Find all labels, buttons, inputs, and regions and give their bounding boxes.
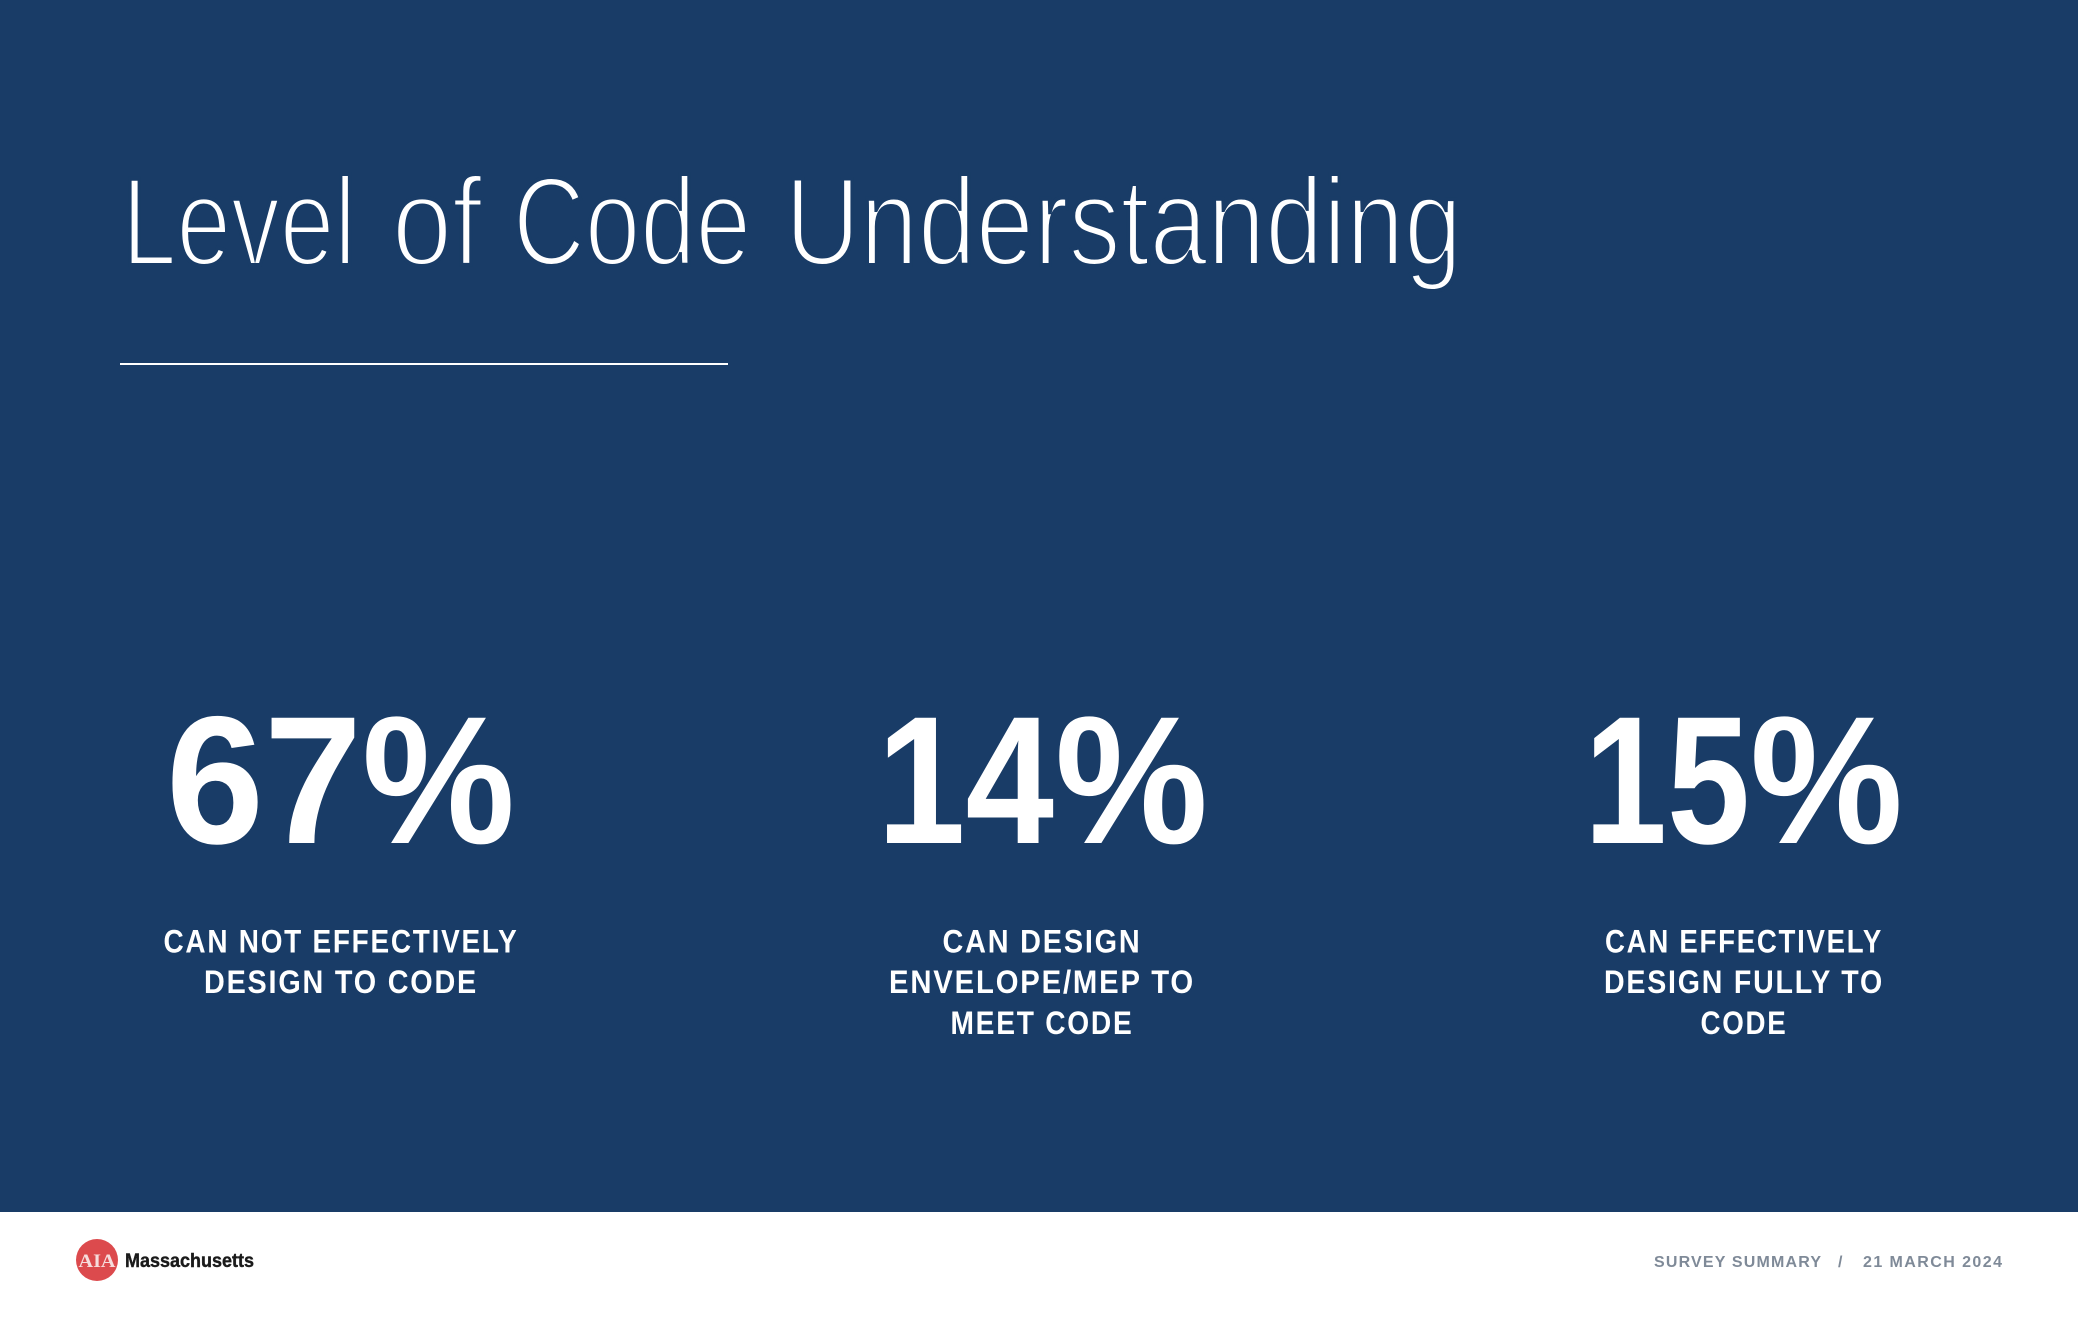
stat label: fully to code: DESIGN FULLY TO <box>1604 964 1884 1000</box>
stat label: envelope or MEP: ENVELOPE/MEP TO <box>889 964 1195 1000</box>
stat value: 14%: % <box>1055 678 1208 882</box>
stat label: envelope or MEP <box>889 924 1195 1041</box>
title <box>122 153 1462 292</box>
stat label: fully to code: CODE <box>1700 1005 1788 1041</box>
stat label: fully to code: CAN EFFECTIVELY <box>1605 924 1883 960</box>
stat label: envelope or MEP: CAN DESIGN <box>942 924 1142 960</box>
logo wordmark: Massachusetts <box>125 1251 254 1272</box>
stat value: 14%: 14 <box>877 678 1054 882</box>
title: Code <box>513 153 751 292</box>
stat label: cannot design to code: DESIGN TO CODE <box>204 964 478 1000</box>
stat label: envelope or MEP: MEET CODE <box>950 1005 1134 1041</box>
stat value: 67%: % <box>362 678 515 882</box>
footer note: survey summary and date: 21 MARCH 2024 <box>1863 1254 2002 1271</box>
stat value: 15%: 15 <box>1584 678 1750 882</box>
stat value: 67% <box>166 678 515 882</box>
stat value: 15% <box>1584 678 1903 882</box>
panel: 67 percent stat <box>164 678 518 1000</box>
footer band <box>0 1212 2078 1330</box>
footer note: survey summary and date: SURVEY SUMMARY <box>1654 1254 1821 1271</box>
title: Level <box>122 153 356 292</box>
icon: AIA red circle: AIA <box>78 1251 116 1272</box>
stat value: 67%: 67 <box>166 678 362 882</box>
stat value: 15%: % <box>1750 678 1903 882</box>
icon: AIA red circle <box>76 1239 118 1281</box>
stat label: cannot design to code: CAN NOT EFFECTIVELY <box>164 924 518 960</box>
logo: AIA Massachusetts <box>76 1239 254 1281</box>
stat value: 14% <box>877 678 1208 882</box>
stat label: cannot design to code <box>164 924 518 1000</box>
title: Understanding <box>785 153 1462 292</box>
title: of <box>392 153 482 292</box>
panel: 15 percent stat <box>1584 678 1903 1041</box>
footer note: survey summary and date: / <box>1838 1254 1843 1271</box>
panel: 14 percent stat <box>877 678 1208 1041</box>
stat label: fully to code <box>1604 924 1884 1041</box>
footer note: survey summary and date <box>1654 1254 2002 1271</box>
